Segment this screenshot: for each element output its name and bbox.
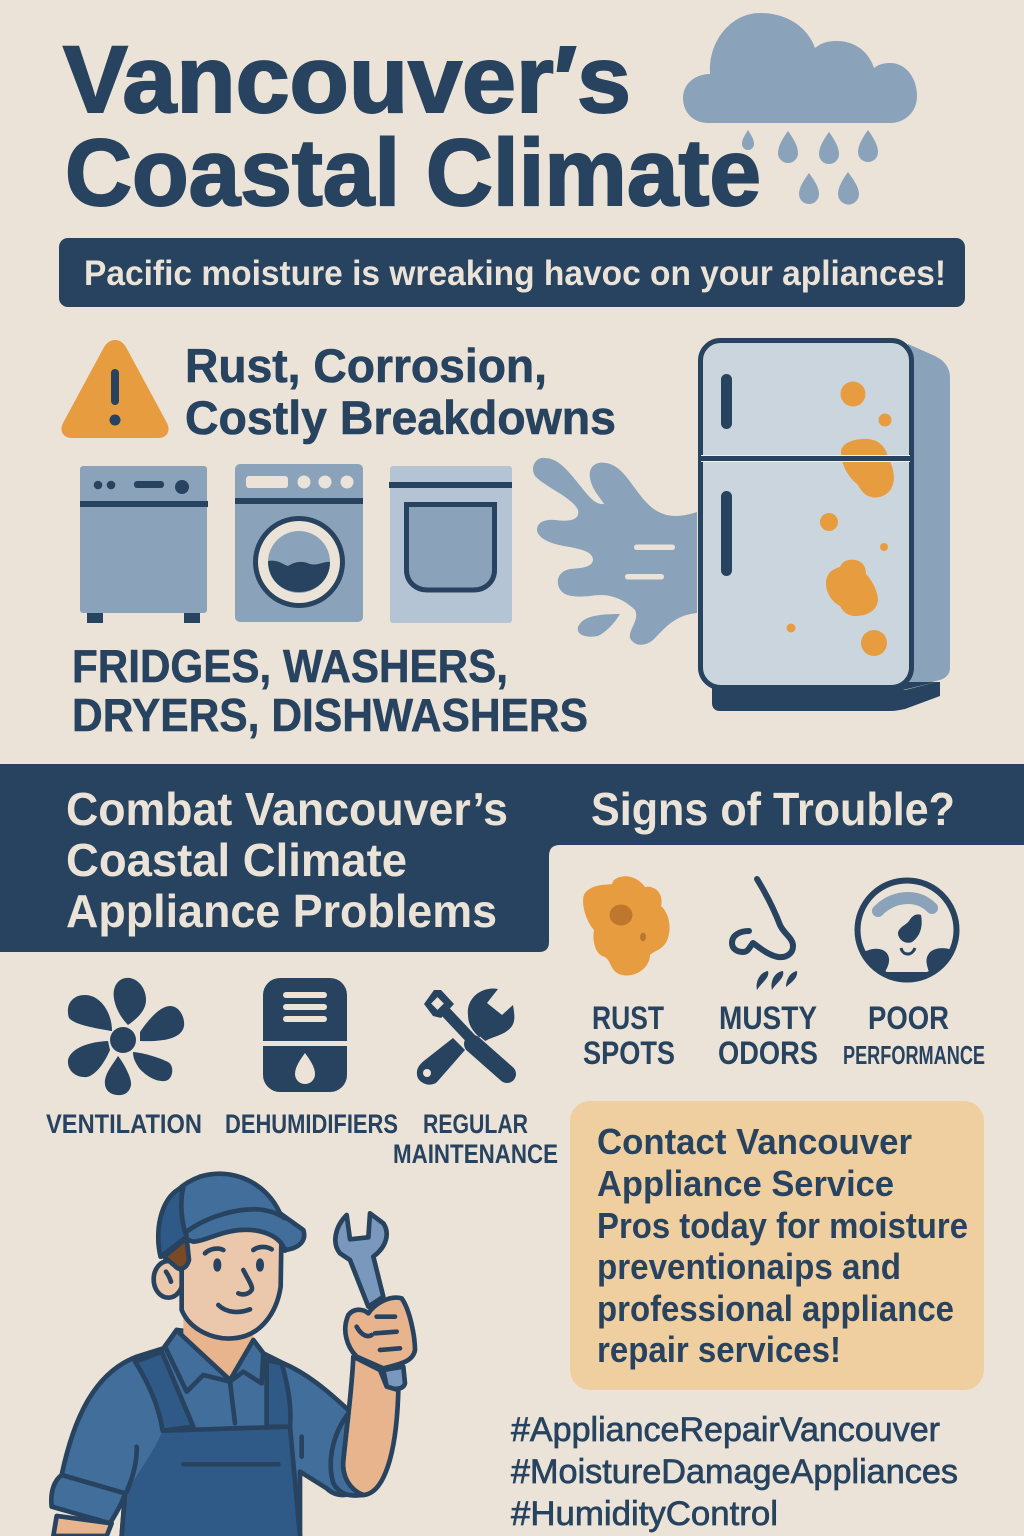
ear: [154, 1261, 183, 1298]
overall bib: [122, 1427, 300, 1536]
callout: contact panel: preventionaips and: [597, 1246, 901, 1287]
arm left: [53, 1516, 112, 1536]
fridge side: [900, 344, 950, 690]
overall straps: [135, 1352, 193, 1431]
warning heading: Costly Breakdowns: [185, 391, 616, 444]
face: [182, 1220, 282, 1339]
hair: [164, 1238, 189, 1269]
hand: [345, 1298, 415, 1368]
door divider: [701, 455, 910, 462]
title: Coastal Climate: [65, 120, 761, 226]
icon: dryer: [389, 466, 512, 623]
heading: signs of trouble: Signs of Trouble?: [591, 783, 955, 835]
dark header band: [0, 764, 1024, 952]
warning heading: [185, 339, 616, 444]
subtitle banner: Pacific moisture is wreaking havoc on your apliances!: [84, 254, 946, 293]
heading: combat climate problems: [66, 783, 508, 937]
icon: rusty fridge: [700, 340, 950, 711]
solution labels: DEHUMIDIFIERS: [225, 1109, 398, 1139]
fridge body: [700, 340, 912, 688]
cap: [158, 1174, 304, 1257]
illustration: technician with wrench: [51, 1174, 415, 1536]
icon: rain cloud: [683, 13, 917, 204]
icon: rust spot: [583, 876, 670, 976]
sign labels: MUSTY: [719, 1000, 817, 1036]
rust spots: [786, 382, 894, 656]
icon: washing machine: [235, 464, 363, 622]
collar: [165, 1330, 263, 1392]
wrench: [335, 1213, 387, 1307]
icon: water splash: [533, 458, 697, 645]
solution labels: REGULAR: [423, 1109, 528, 1139]
subtitle banner: [59, 238, 965, 307]
hashtags: #HumidityControl: [511, 1495, 778, 1533]
hashtags: #MoistureDamageAppliances: [511, 1453, 958, 1491]
facial features: [205, 1247, 272, 1312]
icon: wrench and screwdriver: [417, 989, 514, 1085]
title: Vancouver′s: [63, 27, 631, 133]
icon: dehumidifier: [263, 978, 347, 1092]
callout: contact panel: Contact Vancouver: [597, 1121, 912, 1162]
heading: combat climate problems: Coastal Climate: [66, 834, 407, 886]
solution labels: VENTILATION: [46, 1109, 202, 1139]
hashtags: #ApplianceRepairVancouver: [511, 1411, 940, 1449]
heading: combat climate problems: Appliance Problems: [66, 885, 497, 937]
solution labels: MAINTENANCE: [393, 1139, 558, 1169]
sleeve cuff: [51, 1475, 125, 1523]
warning heading: Rust, Corrosion,: [185, 339, 547, 392]
icon: warning triangle: [61, 340, 169, 438]
icon: dishwasher: [80, 466, 208, 623]
shirt: [62, 1330, 373, 1536]
callout: contact panel: professional appliance: [597, 1288, 954, 1329]
sign labels: SPOTS: [583, 1035, 675, 1071]
appliance list: FRIDGES, WASHERS,: [72, 640, 508, 692]
appliance list: [72, 640, 588, 741]
callout: contact panel: Appliance Service: [597, 1163, 894, 1204]
appliance list: DRYERS, DISHWASHERS: [72, 689, 588, 741]
rolled sleeve: [331, 1413, 363, 1496]
heading: combat climate problems: Combat Vancouver’s: [66, 783, 508, 835]
sign labels: [583, 1000, 985, 1071]
neck: [183, 1317, 253, 1380]
callout: contact panel: [570, 1101, 984, 1390]
sign labels: ODORS: [718, 1035, 818, 1071]
icon: nose: [732, 879, 797, 990]
handles: [721, 374, 732, 429]
icon: performance gauge: [858, 880, 956, 981]
icon: ventilation fan: [68, 978, 184, 1095]
callout: contact panel: repair services!: [597, 1329, 841, 1370]
callout: contact panel: Pros today for moisture: [597, 1205, 968, 1246]
hashtags: [511, 1411, 958, 1533]
fridge base: [712, 682, 940, 711]
solution labels: [46, 1109, 558, 1169]
sign labels: POOR: [868, 1000, 949, 1036]
title: [63, 27, 761, 226]
sign labels: RUST: [592, 1000, 664, 1036]
forearm: [343, 1357, 398, 1495]
